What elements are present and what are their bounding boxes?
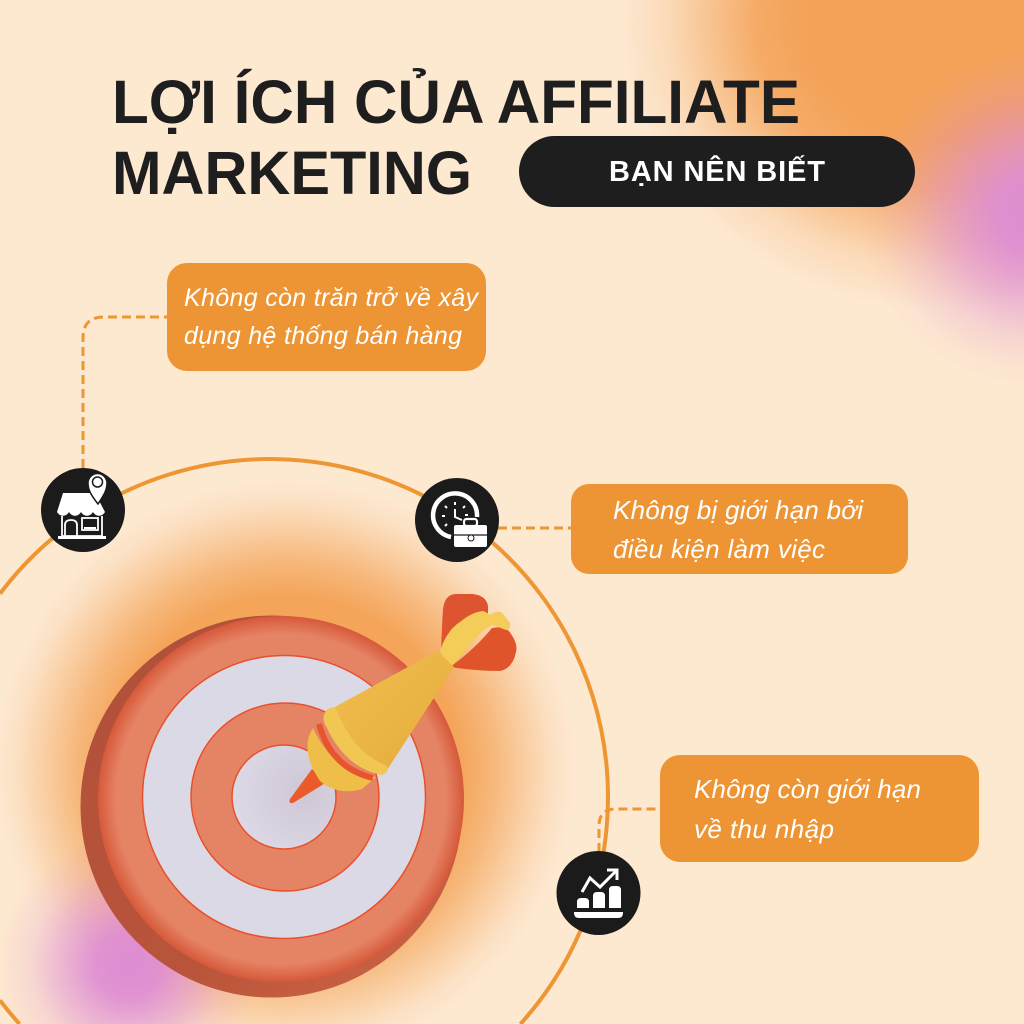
dart tip	[289, 769, 327, 803]
dart lower collar	[307, 728, 376, 791]
dart upper fin	[441, 594, 488, 652]
callout: sales system	[167, 263, 486, 371]
dart cone	[333, 651, 454, 770]
callout: working conditions	[571, 484, 908, 574]
background glow: target	[0, 475, 580, 1024]
callout: income	[660, 755, 979, 862]
connector: chart to callout	[599, 809, 661, 852]
title: MARKETING	[112, 139, 472, 207]
connector: store to callout	[83, 317, 168, 468]
dart upper collar	[324, 707, 388, 775]
icon: store location	[41, 468, 125, 552]
background glow: top right	[600, 0, 1024, 400]
badge: bạn nên biết: BẠN NÊN BIẾT	[609, 154, 825, 188]
icon: growth chart	[556, 851, 640, 935]
target board	[80, 616, 464, 998]
connector: clock to callout	[498, 526, 572, 530]
dart red band	[319, 724, 373, 778]
dart	[289, 594, 516, 803]
callout: sales system: dụng hệ thống bán hàng	[184, 322, 462, 350]
icon: clock and briefcase	[415, 478, 499, 562]
large orbit circle	[0, 459, 608, 1024]
title: LỢI ÍCH CỦA AFFILIATE	[112, 68, 800, 136]
callout: income: Không còn giới hạn	[694, 774, 921, 804]
dart flight spine	[440, 611, 510, 666]
callout: sales system: Không còn trăn trở về xây	[184, 284, 480, 312]
badge: bạn nên biết	[519, 136, 915, 207]
title	[112, 68, 800, 207]
callout: working conditions: Không bị giới hạn bởi	[613, 495, 864, 525]
dart lower fin	[450, 627, 516, 671]
callout: working conditions: điều kiện làm việc	[613, 534, 825, 564]
callout: income: về thu nhập	[694, 814, 834, 844]
